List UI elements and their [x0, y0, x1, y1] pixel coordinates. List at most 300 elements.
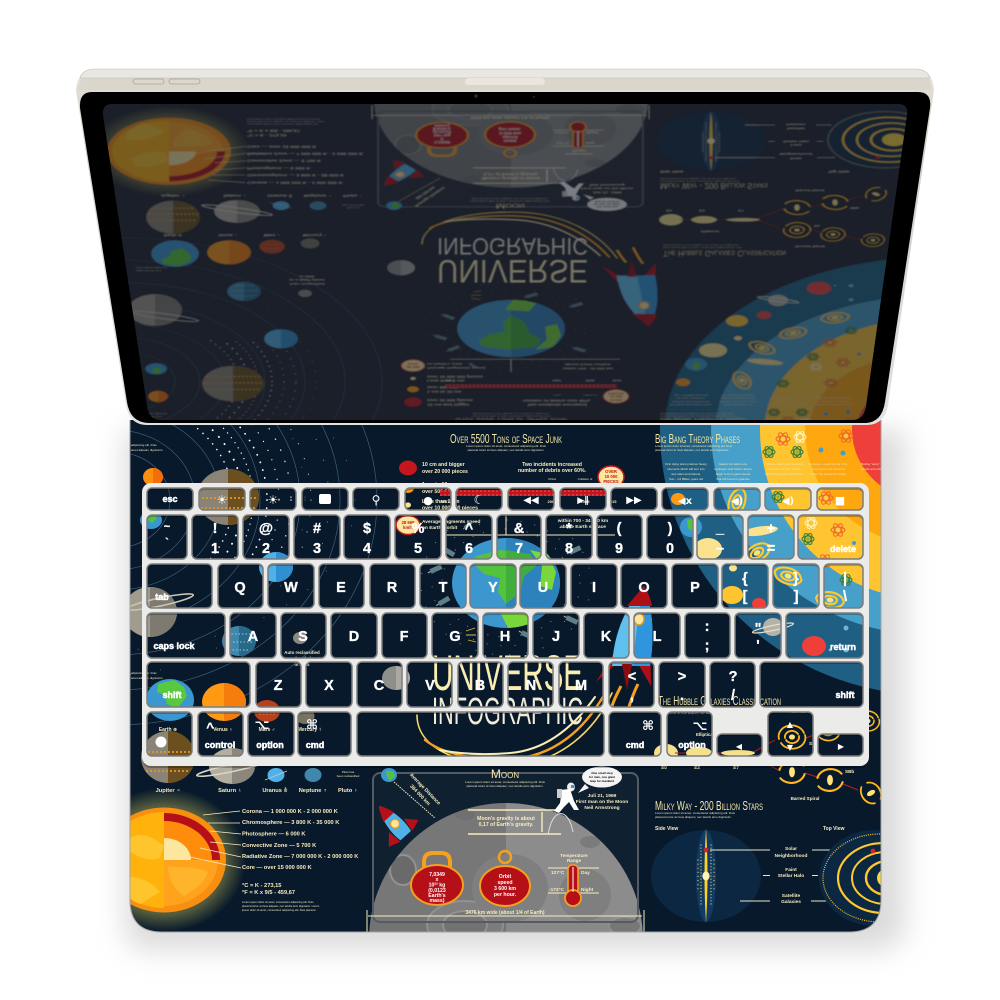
speech bubble — [578, 766, 622, 793]
qwerty row labels: P — [690, 580, 700, 596]
number row labels: $ — [363, 521, 371, 537]
debris size legend: 10 cm and bigger — [422, 462, 465, 468]
Hubble classification: E3 — [694, 765, 700, 770]
lorem note top left — [131, 443, 163, 452]
bottom letter row labels: N — [526, 678, 536, 694]
home row labels: caps lock — [153, 641, 196, 651]
number row labels: + — [767, 521, 775, 537]
planet row: Mercury: Mercury ☿ — [298, 727, 322, 733]
bottom letter row labels: V — [425, 678, 435, 694]
big bang phase captions: render the elements of light. — [809, 472, 847, 476]
thermometer and temperature range: Range — [567, 858, 581, 863]
modifier row labels: option — [256, 740, 284, 750]
function row labels: ◀) — [782, 496, 794, 507]
big bang phase captions: combine and form atoms. — [767, 467, 801, 471]
planet row: Pluto: been reclassified — [337, 774, 360, 778]
moon beside planets — [382, 666, 410, 690]
number row labels: 4 — [363, 541, 371, 557]
Hubble classification: Elliptical — [696, 732, 714, 737]
speech bubble: leap for mankind — [590, 779, 614, 783]
outer ring objects — [671, 493, 848, 656]
qwerty row labels: T — [439, 580, 448, 596]
debris incidents timeline: 2015 — [608, 499, 617, 504]
temperature conversion formulas — [242, 883, 295, 896]
bottom letter row labels: . — [680, 688, 684, 704]
moon mass weight: 10²² kg — [429, 882, 445, 888]
home row labels: J — [552, 629, 560, 645]
main rocket — [596, 586, 652, 710]
thermometer and temperature range: Day — [581, 870, 590, 876]
planet: Pluto with label: in 2006 — [295, 662, 310, 667]
space junk heading: placerat tortor at risus aliquam, nec iaculis arcu dignissim. — [468, 448, 545, 452]
moon heading: placerat tortor at risus aliquam, nec iaculis arcu dignissim. — [467, 784, 544, 788]
temperature conversion formulas: °F = K x 9/5 - 459,67 — [242, 890, 295, 896]
planet row: Saturn — [196, 748, 268, 794]
debris incidents timeline: 10 000 — [605, 474, 618, 479]
home row labels: S — [298, 629, 308, 645]
bottom letter row labels: , — [630, 688, 634, 704]
qwerty row labels: I — [592, 580, 596, 596]
big bang phase captions: Boiling "soup" of — [861, 462, 883, 466]
number row labels: ) — [668, 521, 673, 537]
big bang phase captions — [665, 462, 883, 481]
big bang phase captions: elements which will turn into — [667, 467, 705, 471]
solar neighborhood, halo, satellite labels: Stellar Halo — [778, 873, 804, 879]
moon mass weight: mass) — [430, 898, 445, 904]
debris incidents timeline: number of debris over 60%. — [518, 468, 587, 474]
planet row: Mars: Mars ♂ — [259, 727, 275, 733]
orbit altitude note: within 700 - 34 000 km — [557, 518, 608, 524]
moon mass weight: Earth's — [428, 893, 446, 899]
moon orbit speed stopwatch: Orbit — [499, 874, 511, 880]
debris speed badge: km/h — [403, 525, 413, 530]
number row labels: 1 — [211, 541, 219, 557]
moon orbit speed stopwatch: speed — [498, 880, 512, 886]
debris incidents timeline: OVER — [605, 469, 617, 474]
number row labels: 6 — [465, 541, 473, 557]
function row labels: ■ — [835, 494, 845, 507]
number row labels: @ — [259, 521, 273, 537]
sun lorem text: ipsum dolor sit amet, consectetur adipiscing elit. Duis placerat — [242, 908, 316, 912]
moon mass weight — [411, 853, 463, 905]
solar neighborhood, halo, satellite labels: Satellite — [782, 893, 801, 899]
moon gravity note: 0,17 of Earth's gravity. — [479, 822, 534, 828]
planet row: Earth — [146, 679, 194, 733]
planet: Neptune orbit — [222, 626, 256, 656]
milky way heading: Side View — [655, 826, 678, 832]
planet: Jupiter orbit — [197, 469, 259, 525]
solar neighborhood, halo, satellite labels: Neighborhood — [775, 853, 807, 859]
qwerty row labels: Y — [488, 580, 498, 596]
solar neighborhood, halo, satellite labels: Faint — [785, 867, 797, 873]
big bang concentric phases — [660, 165, 930, 695]
small rocket near moon — [364, 793, 421, 850]
first man on the moon note: Neil Armstrong — [584, 805, 620, 811]
main title: UNIVERSE — [432, 645, 583, 701]
debris size legend: over 500 000 pieces — [422, 489, 471, 495]
thermometer and temperature range: 127°C — [551, 870, 565, 876]
milky way top view spiral — [819, 830, 937, 926]
debris incidents timeline: 2007 — [548, 499, 557, 504]
moon orbit speed stopwatch — [480, 851, 530, 906]
base edge highlight — [130, 420, 881, 932]
bottom letter row labels: shift — [162, 690, 182, 700]
modifier row labels: ▲ — [787, 720, 794, 729]
modifier row labels: ⌘ — [306, 718, 318, 733]
moon orbit speed stopwatch: per hour. — [494, 892, 517, 898]
modifier row labels — [156, 718, 845, 752]
modifier row labels: control — [205, 740, 235, 750]
Hubble classification: The Hubble Galaxies Classification — [658, 693, 781, 708]
home row labels: L — [653, 629, 662, 645]
debris incidents timeline — [440, 462, 624, 504]
modifier row labels: ▼ — [787, 743, 794, 752]
number row labels: ^ — [465, 521, 474, 537]
big bang phase captions: quarks and other — [861, 467, 883, 471]
bottom letter row labels — [162, 669, 855, 704]
planet row: Pluto: Pluto ♇ — [338, 788, 358, 794]
Hubble classification: Lorem ipsum dolor sit amet, consectetur adipiscing elit. Duis — [658, 707, 738, 711]
planet: Earth orbit — [140, 511, 162, 529]
Hubble classification: placerat tortor at risus aliquam, nec iaculis arcu dignissim. — [658, 711, 735, 715]
temperature conversion formulas: °C = K - 273,15 — [242, 883, 281, 889]
qwerty row labels: [ — [743, 589, 748, 605]
number row labels: _ — [715, 521, 725, 537]
function row labels — [162, 493, 845, 507]
bottom letter row labels: M — [575, 678, 587, 694]
soft drop shadow — [125, 430, 905, 950]
big bang phase captions: Mostly hydrogen and helium — [765, 472, 803, 476]
debris size legend: over 20 000 pieces — [422, 469, 468, 475]
main title — [432, 645, 583, 733]
home row labels: : — [705, 619, 709, 635]
space junk heading: Over 5500 Tons of Space Junk — [450, 431, 562, 446]
home row labels: " — [755, 621, 761, 637]
debris speed badge: Average fragments speed — [422, 519, 481, 525]
function row labels: ◀◀ — [523, 495, 539, 506]
function row labels: ◀x — [678, 496, 693, 507]
number row labels: 9 — [615, 541, 623, 557]
Hubble classification: E0 — [661, 765, 667, 770]
big bang heading — [655, 431, 740, 452]
big bang phase captions: first protons and electrons — [811, 467, 846, 471]
sun layers temperature list: Radiative Zone — 7 000 000 K - 2 000 000 K — [242, 854, 359, 860]
debris speed badge: on Earth's orbit — [422, 525, 458, 531]
qwerty row labels: tab — [155, 592, 169, 602]
modifier row labels: ^ — [206, 720, 214, 735]
title swoosh trails — [417, 693, 612, 765]
thermometer and temperature range: Temperature — [560, 853, 588, 858]
number row labels: 3 — [313, 541, 321, 557]
astronaut — [554, 782, 579, 813]
home row labels — [153, 619, 856, 654]
qwerty row labels: } — [793, 571, 799, 587]
planet row: Saturn: Saturn ♄ — [218, 788, 242, 794]
number row labels: * — [566, 521, 572, 537]
moon mass weight: x — [436, 877, 439, 883]
bottom letter row labels: > — [678, 669, 686, 685]
moon mass weight: (0,0123 — [428, 888, 446, 894]
planet: Mercury orbit — [143, 468, 163, 486]
home row labels: A — [248, 629, 259, 645]
home row labels: H — [500, 629, 510, 645]
solar system orbits and star field — [0, 275, 591, 725]
milky way heading: Milky Way - 200 Billion Stars — [655, 798, 763, 813]
big bang phase captions: that will become galaxies — [716, 477, 750, 481]
qwerty row labels: { — [742, 571, 748, 587]
function row labels: ⚲ — [372, 493, 380, 507]
thermometer and temperature range: Night — [581, 887, 594, 893]
planet row: Pluto — [337, 770, 360, 794]
speech bubble: One small step — [591, 771, 613, 775]
bottom letter row labels: shift — [836, 690, 855, 700]
number row labels: 7 — [515, 541, 523, 557]
home row labels: D — [349, 629, 359, 645]
planet row: Earth: Earth ⊕ — [159, 727, 177, 733]
home row labels: ; — [705, 638, 709, 654]
milky way side view — [651, 828, 761, 923]
debris size legend: over 10 000 000 pieces — [422, 506, 478, 512]
modifier row labels: ⌘ — [642, 719, 654, 734]
debris incidents timeline: PIECES — [603, 479, 619, 484]
modifier row labels: cmd — [626, 740, 644, 750]
first man on the moon note: Juli 21, 1969 — [588, 793, 617, 799]
moon orbit speed stopwatch: 3 600 km — [494, 886, 516, 892]
big bang phase captions: Galaxy formation era. — [719, 462, 748, 466]
key legends — [153, 493, 856, 752]
debris incidents timeline: China — [548, 477, 556, 481]
qwerty row labels: W — [284, 580, 298, 596]
function row labels: esc — [162, 494, 178, 504]
solar neighborhood, halo, satellite labels: Galaxies — [781, 899, 801, 905]
moon panel — [367, 773, 644, 949]
number row labels: % — [412, 521, 425, 537]
bottom letter row labels: C — [374, 678, 385, 694]
first man on the moon note: First man on the Moon — [576, 799, 628, 805]
planet row: Neptune — [299, 768, 327, 794]
number row labels: ` — [165, 537, 169, 549]
planet row: Neptune: Neptune ♆ — [299, 788, 327, 794]
planet: Uranus orbit — [259, 552, 293, 582]
lorem note middle left — [131, 671, 163, 680]
thermometer and temperature range: -173°C — [549, 887, 565, 893]
debris incidents timeline: 2009 — [581, 499, 590, 504]
milky way heading: placerat tortor at risus aliquam, nec iaculis arcu dignissim. — [655, 815, 732, 819]
planet row: Uranus: Uranus ⛢ — [262, 787, 288, 794]
big bang heading: placerat tortor at risus aliquam, nec iaculis arcu dignissim. — [655, 448, 729, 452]
home row labels: G — [449, 629, 461, 645]
speech bubble: for man, one giant — [589, 775, 615, 779]
big bang heading: Lorem ipsum dolor sit amet, consectetur adipiscing elit. Duis — [655, 444, 733, 448]
tablet body — [76, 69, 934, 425]
planet: Pluto with label: as a dwarf planet — [284, 656, 320, 661]
sun layers temperature list: Convective Zone — 5 700 K — [242, 843, 317, 849]
debris speed badge — [396, 516, 481, 534]
second ring galaxies — [725, 486, 845, 610]
big bang phase captions: Universe - superhot fog. The — [809, 462, 847, 466]
planet: Pluto with label — [284, 632, 320, 667]
qwerty row labels: | — [843, 571, 847, 587]
number row labels: delete — [830, 544, 856, 554]
bottom letter row labels: X — [324, 678, 334, 694]
moon mass weight: 7,0349 — [429, 872, 445, 878]
debris speed badge: 28 968 — [402, 520, 415, 525]
moon heading — [465, 767, 545, 788]
modifier row labels: cmd — [306, 740, 324, 750]
number row labels: – — [716, 541, 724, 557]
home row labels: ' — [756, 638, 760, 654]
Hubble classification: Sa — [809, 741, 815, 746]
orbit altitude note — [445, 515, 615, 535]
debris incidents timeline: 1957 — [441, 499, 450, 504]
modifier row labels: ◀ — [736, 742, 743, 751]
milky way labels and arrows — [710, 850, 840, 901]
sun cross-section — [82, 788, 246, 932]
keyboard base with printed universe artwork — [130, 420, 880, 932]
sun layers temperature list: Corona — 1 000 000 K - 2 000 000 K — [242, 809, 339, 815]
space junk heading — [450, 431, 562, 452]
lorem note top left: adipiscing elit. Duis — [131, 443, 157, 447]
qwerty row labels: \ — [843, 589, 847, 605]
home row labels: return — [830, 642, 856, 652]
tablet side buttons — [133, 78, 545, 85]
number row labels: 2 — [262, 541, 270, 557]
number row labels: 8 — [565, 541, 573, 557]
small earth and distance arrow: 384 000 km — [408, 784, 432, 807]
function row labels: ▶∥ — [577, 496, 589, 506]
Hubble classification: SBb — [845, 769, 854, 774]
number row labels: ~ — [164, 521, 171, 533]
satellites around earth — [427, 521, 581, 642]
bottom letter row labels: / — [731, 688, 735, 704]
planet row: Mercury — [296, 708, 322, 733]
number row labels: & — [514, 521, 525, 537]
big bang phase captions: Protons, Electrons, Neutrons — [765, 462, 804, 466]
moon heading: Moon — [491, 767, 519, 781]
debris size legend: Less than 1 cm — [422, 499, 460, 505]
Hubble classification: Barred Spiral — [791, 796, 819, 801]
planet row: Pluto: Pluto has — [342, 770, 355, 774]
qwerty row labels — [155, 571, 847, 605]
big bang heading: Big Bang Theory Phases — [655, 431, 740, 446]
number row labels — [164, 521, 856, 557]
qwerty row labels: U — [538, 580, 548, 596]
function row labels: ▶▶ — [626, 495, 642, 506]
modifier row labels: ▶ — [838, 742, 845, 751]
main title: INFOGRAPHIC — [432, 691, 583, 733]
number row labels: 5 — [414, 541, 422, 557]
debris incidents timeline: Collision of — [578, 477, 592, 481]
number row labels: ( — [617, 521, 622, 537]
planet row: Jupiter: Jupiter ♃ — [156, 788, 180, 794]
sun lorem text: placerat tortor at risus aliquam, nec iaculis arcu dignissim. Lorem — [242, 904, 320, 908]
keyboard plate with key openings — [142, 483, 869, 768]
big bang phase captions: First dying stars produce heavy — [665, 462, 707, 466]
sun layers temperature list: Chromosphere — 3 800 K - 35 000 K — [242, 820, 340, 826]
moon gravity note: Moon's gravity is about — [477, 816, 535, 822]
planet row: Venus — [202, 683, 246, 733]
lorem note top left: amet aliquam dignissim. — [131, 448, 163, 452]
bottom letter row labels: ? — [729, 669, 738, 685]
small earth and distance arrow: Average Distance — [408, 772, 442, 807]
thermometer and temperature range — [548, 853, 599, 906]
big bang phase captions: Hydrogen and helium atoms — [714, 467, 752, 471]
milky way heading — [655, 798, 845, 832]
first man on the moon note — [576, 793, 628, 811]
planet row: Venus: Venus ♀ — [213, 727, 233, 733]
modifier row labels: ⌥ — [255, 718, 269, 733]
space junk heading: Lorem ipsum dolor sit amet, consectetur adipiscing elit. Duis — [466, 444, 546, 448]
qwerty row labels: E — [336, 580, 346, 596]
sun layers temperature list — [242, 809, 359, 871]
debris size legend — [399, 460, 478, 512]
milky way heading: Lorem ipsum dolor sit amet, consectetur adipiscing elit. Duis — [655, 811, 735, 815]
universe artwork — [0, 165, 937, 949]
debris incidents timeline: Two incidents increased — [522, 462, 582, 468]
function row labels: ◀) — [731, 496, 743, 507]
lorem note middle left: adipiscing elit. Duis — [131, 671, 157, 675]
planet: Saturn orbit — [123, 587, 194, 637]
lorem note middle left: amet aliquam dignissim. — [131, 676, 163, 680]
number row labels: ! — [213, 521, 217, 537]
yellow and orange ring atoms — [763, 428, 856, 587]
function row labels: ☀ — [268, 493, 278, 507]
solar neighborhood, halo, satellite labels — [775, 846, 807, 905]
number row labels: 0 — [666, 541, 674, 557]
milky way heading: Top View — [823, 826, 845, 832]
screen reflection of the artwork — [0, 94, 942, 596]
Hubble classification: Normal Spiral — [790, 709, 820, 714]
qwerty row labels: Q — [234, 580, 246, 596]
big bang phase captions: new stars and planets. — [671, 472, 701, 476]
front camera — [474, 94, 535, 98]
moon heading: Lorem ipsum dolor sit amet, consectetur adipiscing elit. Duis — [465, 780, 545, 784]
bottom letter row labels: B — [475, 678, 485, 694]
moon width label: 3476 km wide (about 1/4 of Earth) — [465, 910, 545, 916]
planet row: Jupiter — [141, 731, 195, 794]
home row labels: F — [400, 629, 409, 645]
orbit altitude note: above Earth surface — [560, 524, 606, 530]
function row labels: ☀ — [217, 493, 227, 507]
big bang phase captions: begin to form giant clouds — [716, 472, 751, 476]
function row labels: ● — [423, 494, 433, 507]
Hubble classification: E7 — [733, 765, 739, 770]
big earth with debris — [452, 538, 560, 632]
planet row: Mars — [254, 700, 280, 733]
modifier row labels: option — [678, 740, 706, 750]
qwerty row labels: ] — [794, 589, 799, 605]
sun lorem text: Lorem ipsum dolor sit amet, consectetur adipiscing elit. Duis — [242, 900, 314, 904]
moon gravity note — [477, 816, 535, 828]
bottom letter row labels: Z — [274, 678, 283, 694]
number row labels: = — [767, 541, 775, 557]
sun lorem text — [242, 900, 320, 912]
home row labels: K — [601, 629, 612, 645]
number row labels: # — [313, 521, 321, 537]
qwerty row labels: R — [387, 580, 398, 596]
small earth and distance arrow — [381, 768, 442, 818]
sun layers temperature list: Photosphere — 6 000 K — [242, 832, 306, 838]
planet: Pluto with label: Auto reclassified — [284, 650, 320, 655]
function row labels: ☾ — [474, 493, 484, 507]
planet row: Uranus — [262, 768, 288, 794]
sun layers temperature list: Core — over 15 000 000 K — [242, 865, 312, 871]
solar neighborhood, halo, satellite labels: Solar — [785, 846, 797, 852]
Hubble classification — [654, 693, 884, 807]
big bang phase captions: Sun - 4.6 Billion years old — [669, 477, 703, 481]
debris size legend: 1 cm to 10 cm — [422, 482, 457, 488]
modifier row labels: ⌥ — [693, 719, 707, 734]
